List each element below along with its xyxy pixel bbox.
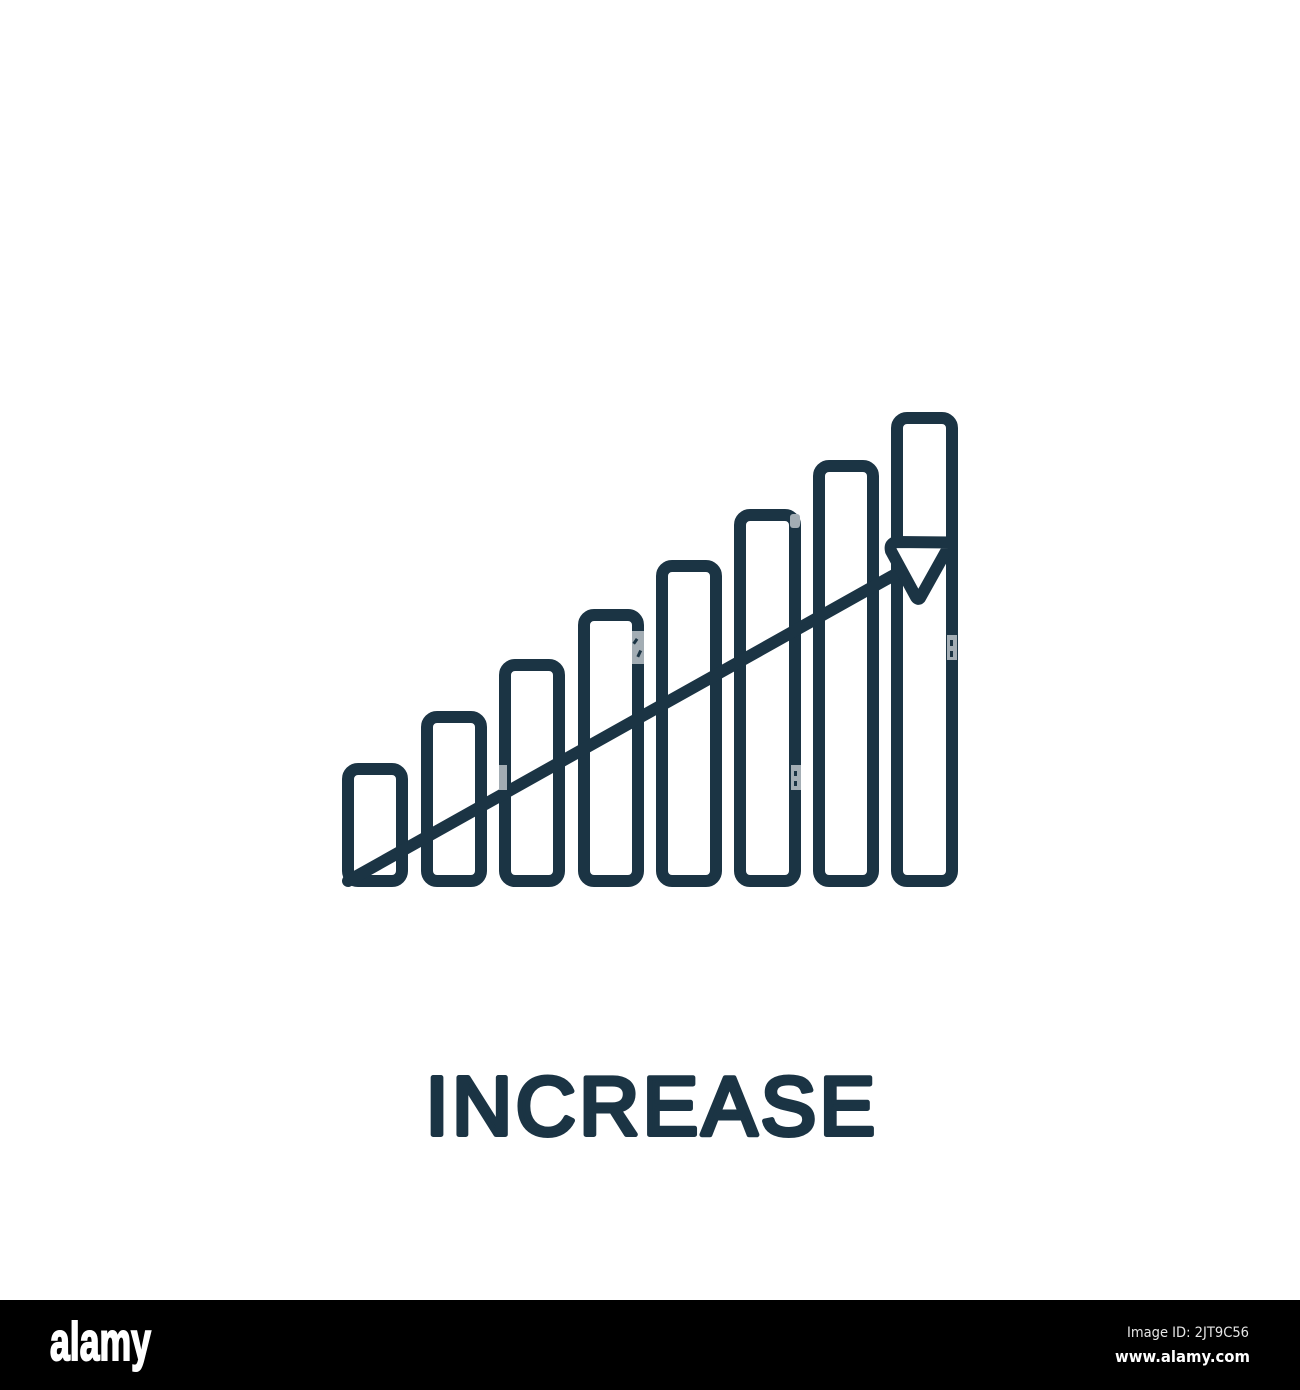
bar 2 bbox=[427, 717, 481, 881]
icon: rising bar chart with arrow bbox=[348, 418, 952, 881]
bar 7 bbox=[819, 466, 873, 881]
bar 6 bbox=[740, 515, 795, 881]
bar 5 bbox=[662, 566, 716, 881]
bar 8 bbox=[897, 418, 952, 881]
image id: Image ID: 2JT9C56 bbox=[1127, 1325, 1249, 1341]
website: www.alamy.com bbox=[1115, 1347, 1250, 1366]
logo: alamy: alamy bbox=[50, 1312, 151, 1372]
footer bar bbox=[0, 1300, 1300, 1390]
title: INCREASE bbox=[426, 1060, 879, 1152]
bar 4 bbox=[584, 615, 638, 881]
arrow head bbox=[891, 542, 951, 599]
arrow bbox=[348, 542, 951, 881]
bar 1 bbox=[348, 769, 402, 881]
bar 3 bbox=[505, 665, 559, 881]
arrow shaft bbox=[348, 570, 903, 881]
